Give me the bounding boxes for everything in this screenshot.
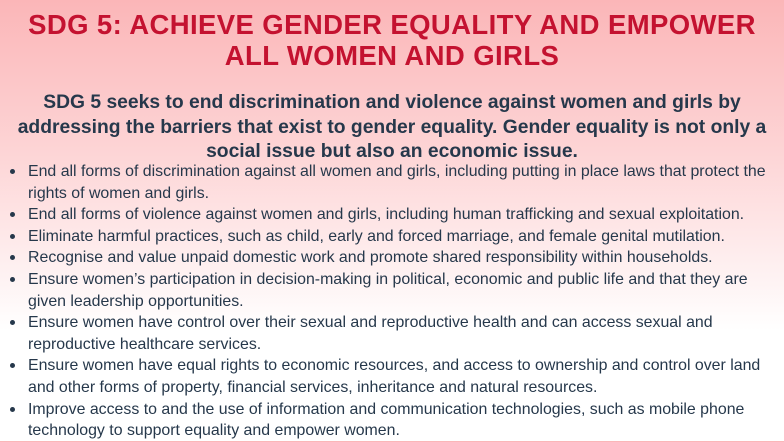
- bullet list: [10, 163, 766, 439]
- bullet list: and other forms of property, financial services, inheritance and natural resources.: [28, 379, 597, 396]
- subtitle text block: addressing the barriers that exist to gender equality. Gender equality is not only a: [18, 116, 766, 138]
- bullet list: Improve access to and the use of information and communication technologies, such as mobile phone: [28, 401, 744, 418]
- title: SDG 5: ACHIEVE GENDER EQUALITY AND EMPOWER: [28, 9, 756, 40]
- bullet list: Ensure women’s participation in decision-making in political, economic and public life and that they are: [28, 271, 748, 288]
- title: [28, 9, 756, 71]
- subtitle text block: [18, 92, 766, 162]
- bullet list: End all forms of discrimination against all women and girls, including putting in place laws that protect the: [28, 163, 766, 180]
- bullet list: Ensure women have control over their sexual and reproductive health and can access sexual and: [28, 314, 713, 331]
- subtitle text block: social issue but also an economic issue.: [206, 141, 578, 162]
- bullet list: given leadership opportunities.: [28, 293, 244, 310]
- bullet list: Recognise and value unpaid domestic work and promote shared responsibility within households.: [28, 249, 713, 266]
- bullet list: reproductive healthcare services.: [28, 336, 261, 353]
- bullet list: End all forms of violence against women and girls, including human trafficking and sexual exploitation.: [28, 206, 744, 223]
- bullet list: technology to support equality and empower women.: [28, 422, 400, 439]
- subtitle text block: SDG 5 seeks to end discrimination and violence against women and girls by: [43, 92, 741, 113]
- bullet list: Eliminate harmful practices, such as child, early and forced marriage, and female genital mutilation.: [28, 228, 725, 245]
- bullet list: Ensure women have equal rights to economic resources, and access to ownership and control over land: [28, 357, 760, 374]
- bullet list: rights of women and girls.: [28, 185, 209, 202]
- title: ALL WOMEN AND GIRLS: [225, 40, 559, 71]
